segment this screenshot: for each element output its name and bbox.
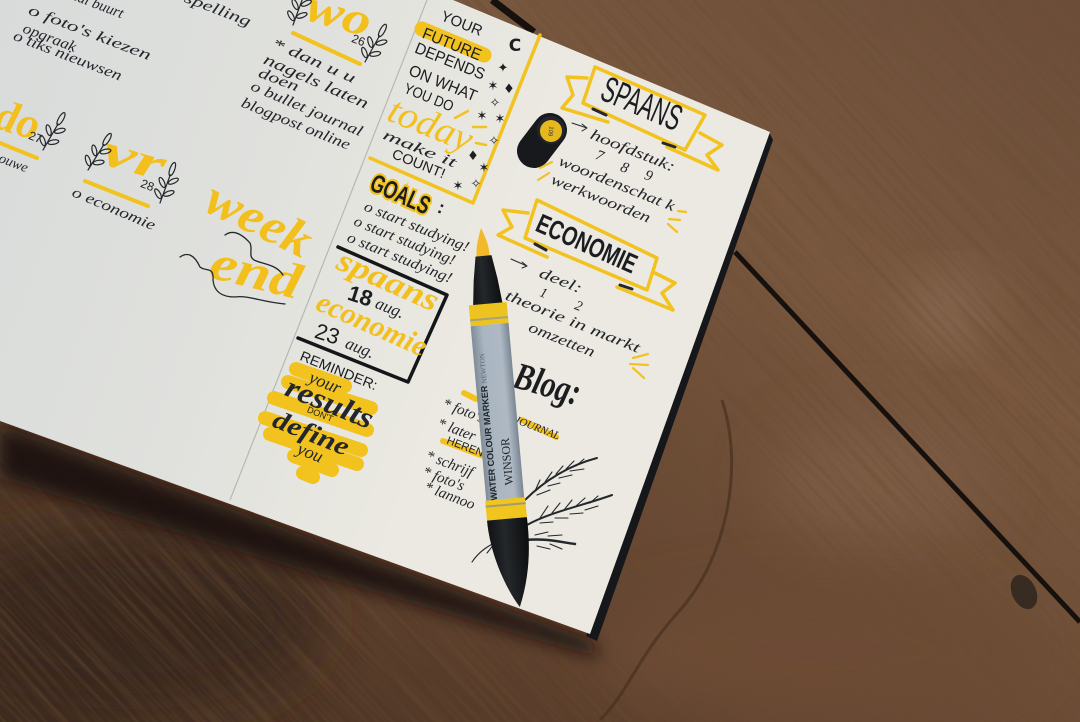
marker: grey barrel — [471, 323, 524, 502]
quote: your future depends on what you do today: COUNT! — [390, 145, 448, 181]
weekend lettering: week — [197, 169, 322, 268]
reminder note: your — [304, 366, 345, 398]
page fold — [230, 0, 427, 500]
quote side stars and moon: C — [509, 36, 521, 56]
goals list: o start studying! — [351, 214, 458, 269]
quote side stars and moon: ✶ — [495, 112, 505, 127]
spaans notes: 9 — [642, 167, 655, 185]
marker: barrel label text — [476, 351, 517, 501]
quote: your future depends on what you do today: YOUR — [438, 8, 485, 40]
pen drop lines by cap — [538, 162, 552, 180]
marker: barrel label text: WINSOR — [498, 437, 516, 486]
blog list: HEREN — [445, 435, 485, 460]
goals list: o start studying! — [362, 199, 471, 256]
left page: to-do notes at top: o foto's kiezen — [26, 3, 153, 64]
marker pen cap — [534, 116, 565, 151]
banner: Economie — [498, 200, 675, 310]
notes under wo: o bullet journal — [248, 79, 365, 140]
day heading: vr 28: o economie — [69, 185, 158, 234]
quote: your future depends on what you do today: make it — [380, 127, 460, 172]
marker: black nib collar — [469, 255, 503, 308]
marker: upper yellow band — [469, 302, 509, 326]
banner: Economie: ECONOMIE — [531, 209, 641, 280]
day heading: do 27 — [0, 90, 74, 176]
exam dates box: spaans — [331, 241, 445, 318]
day heading: do 27: 27 — [27, 128, 44, 146]
exam dates box: 23 — [312, 318, 343, 350]
quote panel frame — [370, 35, 540, 203]
exam dates box: 18 — [345, 280, 376, 312]
spaans notes: hoofdstuk: — [588, 127, 677, 176]
quote: your future depends on what you do today — [380, 8, 487, 181]
banner: Spaans: SPAANS — [595, 69, 688, 139]
banner: Spaans — [562, 67, 722, 170]
open notebook pages — [0, 0, 770, 634]
marker: barrel label text: NEWTON — [478, 353, 489, 384]
marker pen cap: 109 — [546, 126, 554, 137]
quote: your future depends on what you do today: today — [382, 89, 479, 161]
spaans notes: 7 — [593, 147, 607, 166]
economie notes: theorie in markt — [503, 288, 643, 357]
reminder note: REMINDER: — [298, 348, 380, 393]
economie notes — [503, 259, 648, 378]
economie notes: omzetten — [526, 320, 597, 361]
blog list: * lannoo — [422, 479, 477, 513]
weekend lettering — [180, 169, 322, 310]
quote side stars and moon: ♦ — [503, 82, 515, 97]
day heading: wo 26: 26 — [350, 31, 367, 49]
quote: your future depends on what you do today: DEPENDS — [412, 40, 487, 84]
quote side stars and moon: ✶ — [477, 109, 487, 124]
economie notes: 2 — [572, 298, 584, 315]
quote side stars and moon: ♦ — [467, 149, 479, 164]
day heading: wo 26 — [283, 0, 395, 67]
goals list: o start studying! — [345, 230, 454, 287]
notebook back cover edge — [586, 130, 773, 641]
blog list: * foto's — [440, 396, 487, 427]
blog list — [420, 393, 561, 513]
reminder note: define — [269, 405, 354, 462]
left page: to-do notes at top: o tiks nieuwsen — [11, 28, 124, 84]
notes under wo: nagels laten — [261, 51, 371, 113]
quote: your future depends on what you do today: ON WHAT — [406, 62, 479, 105]
spaans notes: 8 — [618, 159, 631, 177]
economie notes: 1 — [537, 285, 549, 302]
blog list: JOURNAL — [513, 414, 561, 442]
rosemary sprigs — [472, 458, 612, 562]
quote: your future depends on what you do today: YOU DO — [401, 80, 456, 115]
left page: to-do notes at top: opgraak — [20, 21, 79, 56]
quote side stars and moon: ✧ — [490, 96, 501, 111]
marker: black brush end — [487, 517, 535, 609]
day heading: vr 28: vr — [96, 124, 174, 191]
notes under wo — [239, 36, 371, 154]
quote side stars and moon: ✶ — [479, 161, 489, 176]
reminder note: results — [281, 371, 378, 436]
day heading: vr 28: 28 — [139, 176, 156, 194]
exam dates box: economie — [311, 285, 432, 363]
quote side stars and moon: ✧ — [489, 134, 500, 149]
reminder note: you — [293, 438, 326, 467]
economie notes: deel: — [537, 265, 584, 297]
blog list: * foto's — [420, 464, 467, 495]
marker: barrel label text: WATER COLOUR MARKER — [479, 385, 499, 501]
spaans notes: werkwoorden — [548, 172, 653, 227]
blog list: * schrijf — [423, 448, 477, 481]
exam dates box: aug. — [373, 294, 407, 322]
notes under wo: doen — [256, 65, 301, 95]
Winsor and Newton marker pen — [461, 226, 535, 609]
quote side stars and moon: ✶ — [488, 79, 498, 94]
notebook shadow — [0, 425, 600, 658]
marker: lower yellow band — [485, 497, 527, 521]
quote side stars and moon — [453, 36, 521, 194]
spaans notes: woordenschat k — [556, 154, 677, 215]
plank seams — [492, 0, 1080, 622]
quote side stars and moon: ✦ — [498, 61, 509, 76]
exam dates box: aug. — [343, 334, 377, 362]
notes under wo: blogpost online — [239, 95, 353, 154]
reminder note — [265, 348, 380, 477]
goals heading: GOALS — [366, 168, 435, 220]
quote side stars and moon: ✶ — [453, 179, 463, 194]
exam dates box — [298, 241, 447, 382]
left page: to-do notes at top — [11, 0, 254, 84]
blog list: * later — [435, 416, 478, 445]
day heading: vr 28 — [69, 124, 185, 234]
spaans notes — [548, 123, 686, 232]
quote: your future depends on what you do today: FUTURE — [420, 25, 484, 64]
weekend lettering: end — [205, 233, 309, 310]
goals list — [345, 199, 471, 287]
marker: yellow brush tip — [474, 227, 490, 259]
reminder note: DON'T — [306, 404, 335, 424]
blog heading: Blog: — [508, 355, 586, 414]
goals heading: : — [435, 197, 448, 218]
notes under wo: * dan u u — [269, 36, 358, 87]
quote side stars and moon: ✧ — [471, 177, 482, 192]
